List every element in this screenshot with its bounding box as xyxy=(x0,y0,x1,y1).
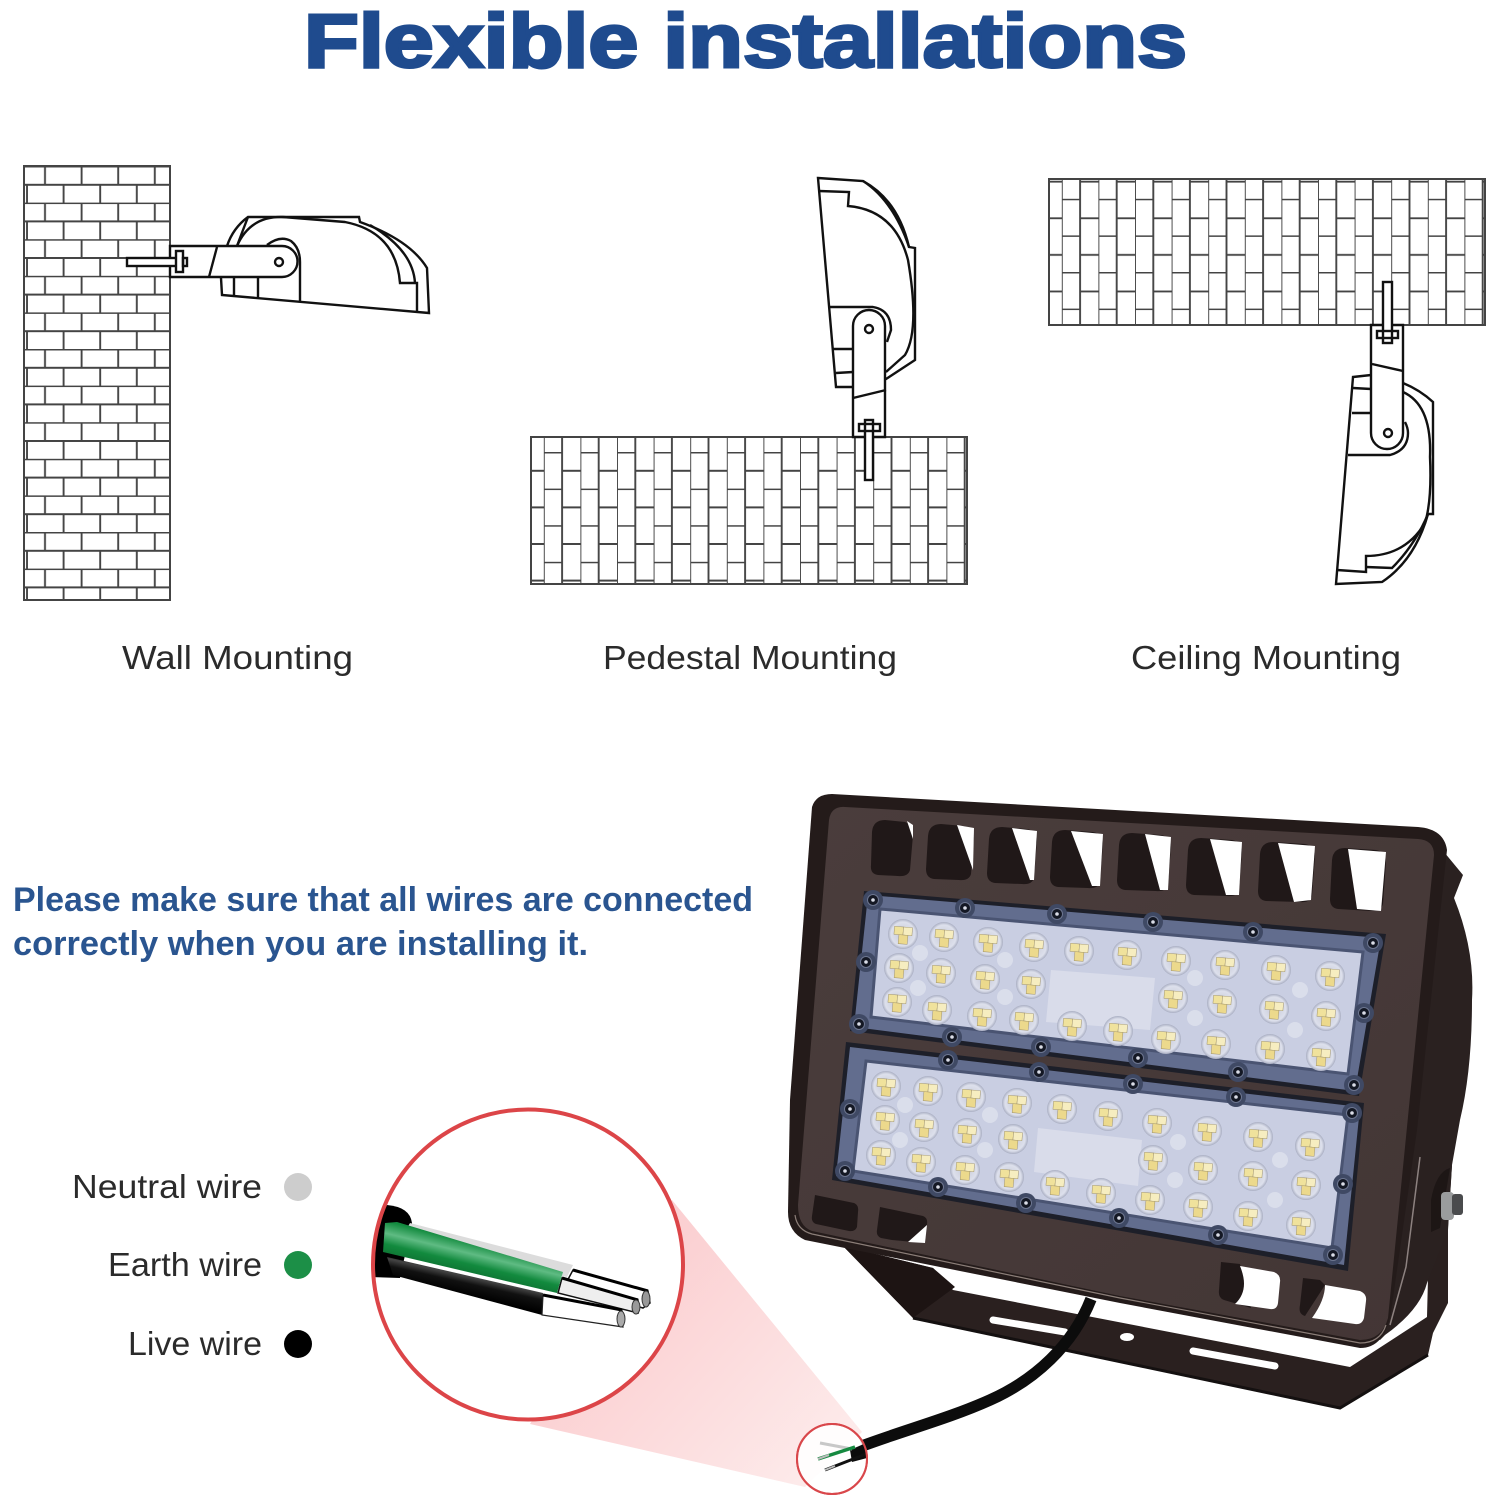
legend item: earth: Earth wire xyxy=(108,1246,262,1283)
top vents xyxy=(871,820,1386,911)
brick wall: horizontal xyxy=(531,437,967,584)
brick ceiling xyxy=(1049,179,1485,325)
legend item: live: Live wire xyxy=(128,1325,262,1362)
title: Flexible installations xyxy=(304,0,1187,84)
label: ceiling mounting: Ceiling Mounting xyxy=(1131,639,1401,676)
panel: ceiling mounting xyxy=(1049,179,1485,676)
side panel edges xyxy=(1390,1157,1420,1325)
bottom vents xyxy=(812,1195,1366,1324)
callout: wiring note xyxy=(13,881,753,963)
panel: pedestal mounting xyxy=(531,178,967,676)
bracket xyxy=(843,1165,1452,1408)
magnified wire circle xyxy=(370,1110,683,1420)
small detail circle: cable end xyxy=(797,1424,867,1494)
rear housing xyxy=(1200,835,1472,1340)
callout: wiring note: Please make sure that all wires are connected xyxy=(13,881,753,919)
floodlight product xyxy=(788,794,1472,1446)
lamp side view: ceiling xyxy=(1336,282,1433,584)
lamp side view: wall xyxy=(127,217,429,313)
magnified wires xyxy=(370,1205,650,1327)
LED module: upper xyxy=(849,890,1386,1096)
callout: wiring note: correctly when you are installing it. xyxy=(13,925,588,963)
legend: wire colours xyxy=(72,1168,312,1362)
legend item: neutral: Neutral wire xyxy=(72,1168,262,1205)
magnifier cone xyxy=(530,1200,862,1487)
brick wall: vertical xyxy=(24,166,170,600)
label: wall mounting: Wall Mounting xyxy=(122,639,353,676)
panel: wall mounting xyxy=(24,166,429,676)
label: pedestal mounting: Pedestal Mounting xyxy=(603,639,897,676)
front frame xyxy=(788,794,1447,1348)
lamp side view: pedestal xyxy=(818,178,915,480)
power cable xyxy=(862,1299,1091,1446)
LED module: lower xyxy=(832,1042,1364,1271)
mounting bolt xyxy=(1431,1168,1463,1232)
